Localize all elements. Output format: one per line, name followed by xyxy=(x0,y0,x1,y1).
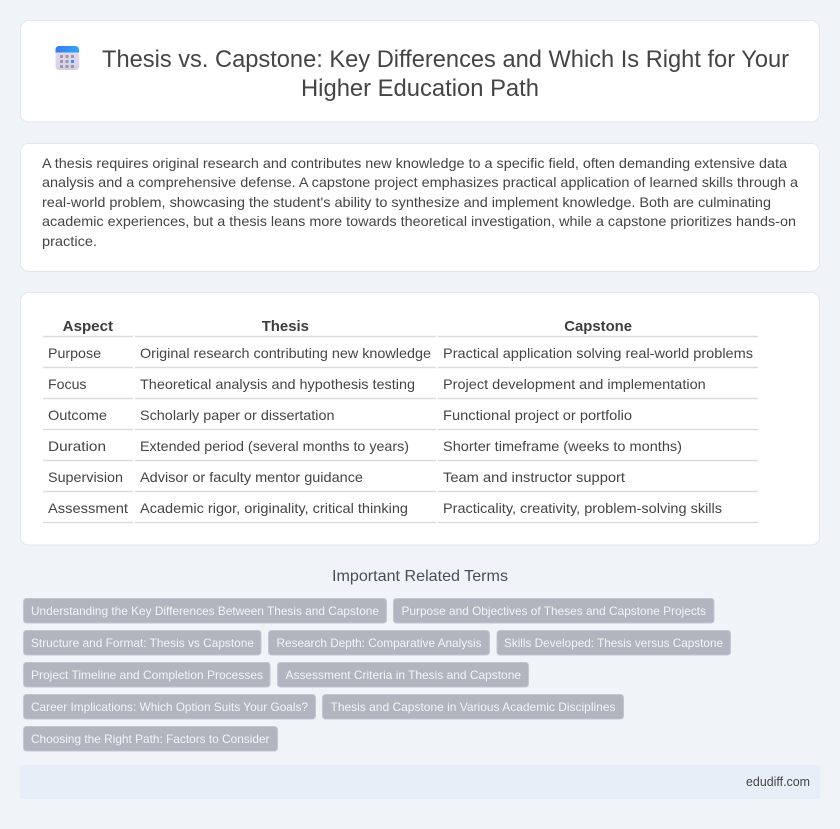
summary text: practice. xyxy=(42,233,97,249)
tag: Assessment Criteria in Thesis and Capstone xyxy=(286,668,521,682)
row: duration: Duration xyxy=(48,438,106,454)
tag: Structure and Format: Thesis vs Capstone xyxy=(31,636,254,650)
title: Thesis vs. Capstone: Key Differences and Which Is Right for Your xyxy=(102,46,789,73)
row: supervision xyxy=(48,469,625,485)
tag: Purpose and Objectives of Theses and Capstone Projects xyxy=(402,604,706,618)
summary text: A thesis requires original research and contributes new knowledge to a specific field, often demanding extensive data xyxy=(42,155,787,171)
tag: Project Timeline and Completion Processes xyxy=(31,668,263,682)
table header xyxy=(63,318,632,335)
footer text: edudiff.com xyxy=(746,774,810,789)
row: assessment: Academic rigor, originality, critical thinking xyxy=(140,500,408,516)
row: supervision: Team and instructor support xyxy=(443,469,625,485)
tag xyxy=(24,598,386,623)
title xyxy=(102,46,789,102)
tag: Thesis and Capstone in Various Academic Disciplines xyxy=(330,700,616,714)
header card xyxy=(20,20,820,122)
tag xyxy=(497,630,730,655)
row: duration: Shorter timeframe (weeks to months) xyxy=(443,438,682,454)
tag xyxy=(322,694,624,719)
row: purpose: Original research contributing new knowledge xyxy=(140,345,431,361)
summary text xyxy=(42,155,798,249)
tag xyxy=(24,726,278,751)
row: outcome: Scholarly paper or dissertation xyxy=(140,407,334,423)
summary text: analysis and a comprehensive defense. A capstone project emphasizes practical application of learned skills through a xyxy=(42,174,798,190)
tag: Skills Developed: Thesis versus Capstone xyxy=(504,636,723,650)
row: outcome: Outcome xyxy=(48,407,107,423)
row: focus xyxy=(48,376,706,392)
comparison table panel xyxy=(20,292,820,545)
row: focus: Project development and implementation xyxy=(443,376,706,392)
row: supervision: Supervision xyxy=(48,469,123,485)
tag: Career Implications: Which Option Suits Your Goals? xyxy=(31,700,308,714)
row: assessment: Assessment xyxy=(48,500,128,516)
row: purpose xyxy=(48,345,753,361)
summary panel xyxy=(20,144,820,272)
row: focus: Theoretical analysis and hypothesis testing xyxy=(140,376,415,392)
tag: Choosing the Right Path: Factors to Consider xyxy=(31,732,270,746)
table header: Capstone xyxy=(564,318,632,335)
related terms tags xyxy=(24,598,730,751)
tag xyxy=(268,630,490,655)
summary text: real-world problem, showcasing the student's ability to synthesize and implement knowledge. Both are culminating xyxy=(42,194,771,210)
row: focus: Focus xyxy=(48,376,86,392)
row: duration xyxy=(48,438,682,454)
row: assessment xyxy=(48,500,722,516)
tag: Research Depth: Comparative Analysis xyxy=(276,636,482,650)
tag xyxy=(24,694,316,719)
row: purpose: Practical application solving real-world problems xyxy=(443,345,753,361)
title: Higher Education Path xyxy=(301,75,539,102)
related terms heading: Important Related Terms xyxy=(332,568,508,585)
tag xyxy=(278,662,528,687)
tag xyxy=(24,662,270,687)
row: assessment: Practicality, creativity, problem-solving skills xyxy=(443,500,722,516)
footer bar xyxy=(20,765,820,799)
tag xyxy=(24,630,261,655)
tag xyxy=(394,598,714,623)
row: outcome: Functional project or portfolio xyxy=(443,407,632,423)
row: duration: Extended period (several months to years) xyxy=(140,438,409,454)
row: supervision: Advisor or faculty mentor guidance xyxy=(140,469,363,485)
row: outcome xyxy=(48,407,632,423)
icon: calendar xyxy=(56,46,79,70)
row: purpose: Purpose xyxy=(48,345,101,361)
table header: Aspect xyxy=(63,318,113,335)
table header: Thesis xyxy=(262,318,309,335)
summary text: academic experiences, but a thesis leans more towards theoretical investigation, while a capstone prioritizes hands-on xyxy=(42,213,796,229)
tag: Understanding the Key Differences Between Thesis and Capstone xyxy=(31,604,379,618)
